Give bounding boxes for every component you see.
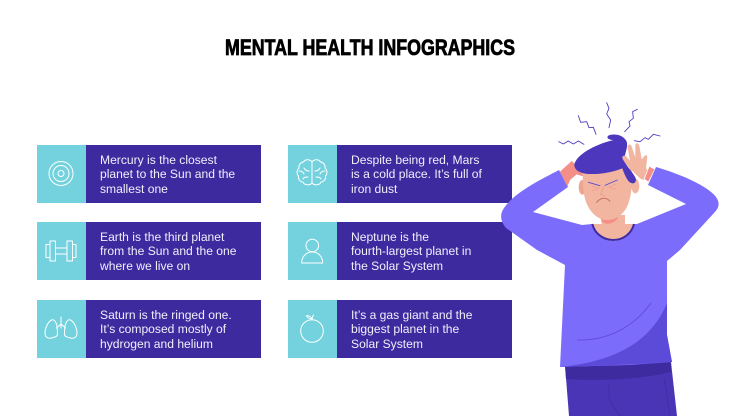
text: Neptune: the Solar System	[351, 259, 443, 273]
text: Mercury: Mercury is the closest	[100, 152, 217, 166]
panel: Earth	[37, 222, 261, 280]
text: Jupiter: It’s a gas giant and the	[351, 308, 472, 322]
pants	[565, 362, 677, 416]
right cuff skin	[645, 167, 654, 182]
icon: dumbbell	[37, 222, 86, 280]
right hand	[622, 143, 647, 180]
panel: Saturn	[37, 300, 261, 358]
text: Neptune	[337, 222, 512, 280]
text: Mars: iron dust	[351, 182, 397, 196]
text: Saturn: Saturn is the ringed one.	[100, 308, 232, 322]
stress squiggles	[559, 103, 660, 144]
icon: lungs	[37, 300, 86, 358]
panel: Neptune	[288, 222, 512, 280]
text: Mercury: smallest one	[100, 182, 168, 196]
neck and chest	[592, 215, 634, 240]
text: Jupiter: Solar System	[351, 337, 423, 351]
text: Mercury: planet to the Sun and the	[100, 167, 235, 181]
text: Jupiter: biggest planet in the	[351, 322, 459, 336]
panel: Mars	[288, 145, 512, 203]
text: Mercury	[86, 145, 261, 202]
face	[583, 168, 632, 220]
head and hands	[560, 135, 654, 240]
text: Saturn: hydrogen and helium	[100, 337, 213, 351]
text: Mars	[337, 145, 512, 202]
hair	[574, 135, 636, 183]
text: Jupiter	[337, 300, 512, 358]
sweater	[501, 167, 719, 367]
panel: Mercury	[37, 145, 261, 203]
neck shadow	[601, 217, 618, 224]
text: Earth: Earth is the third planet	[100, 230, 224, 244]
eyebrows and eyes	[588, 180, 617, 202]
text: Neptune: Neptune is the	[351, 230, 429, 244]
icon: apple	[288, 300, 337, 358]
text: Earth	[86, 222, 261, 280]
panel: Jupiter	[288, 300, 512, 358]
text: Neptune: fourth-largest planet in	[351, 244, 471, 258]
ears	[579, 180, 586, 195]
text: Earth: from the Sun and the one	[100, 244, 236, 258]
text: Earth: where we live on	[100, 259, 190, 273]
neckline	[592, 224, 634, 240]
icon: brain	[288, 145, 337, 202]
icon: target	[37, 145, 86, 202]
icon: person	[288, 222, 337, 280]
text: Mars: Despite being red, Mars	[351, 152, 479, 166]
left hand	[560, 161, 584, 187]
text: Saturn: It’s composed mostly of	[100, 322, 226, 336]
text: Saturn	[86, 300, 261, 358]
text: Mars: is a cold place. It’s full of	[351, 167, 482, 181]
